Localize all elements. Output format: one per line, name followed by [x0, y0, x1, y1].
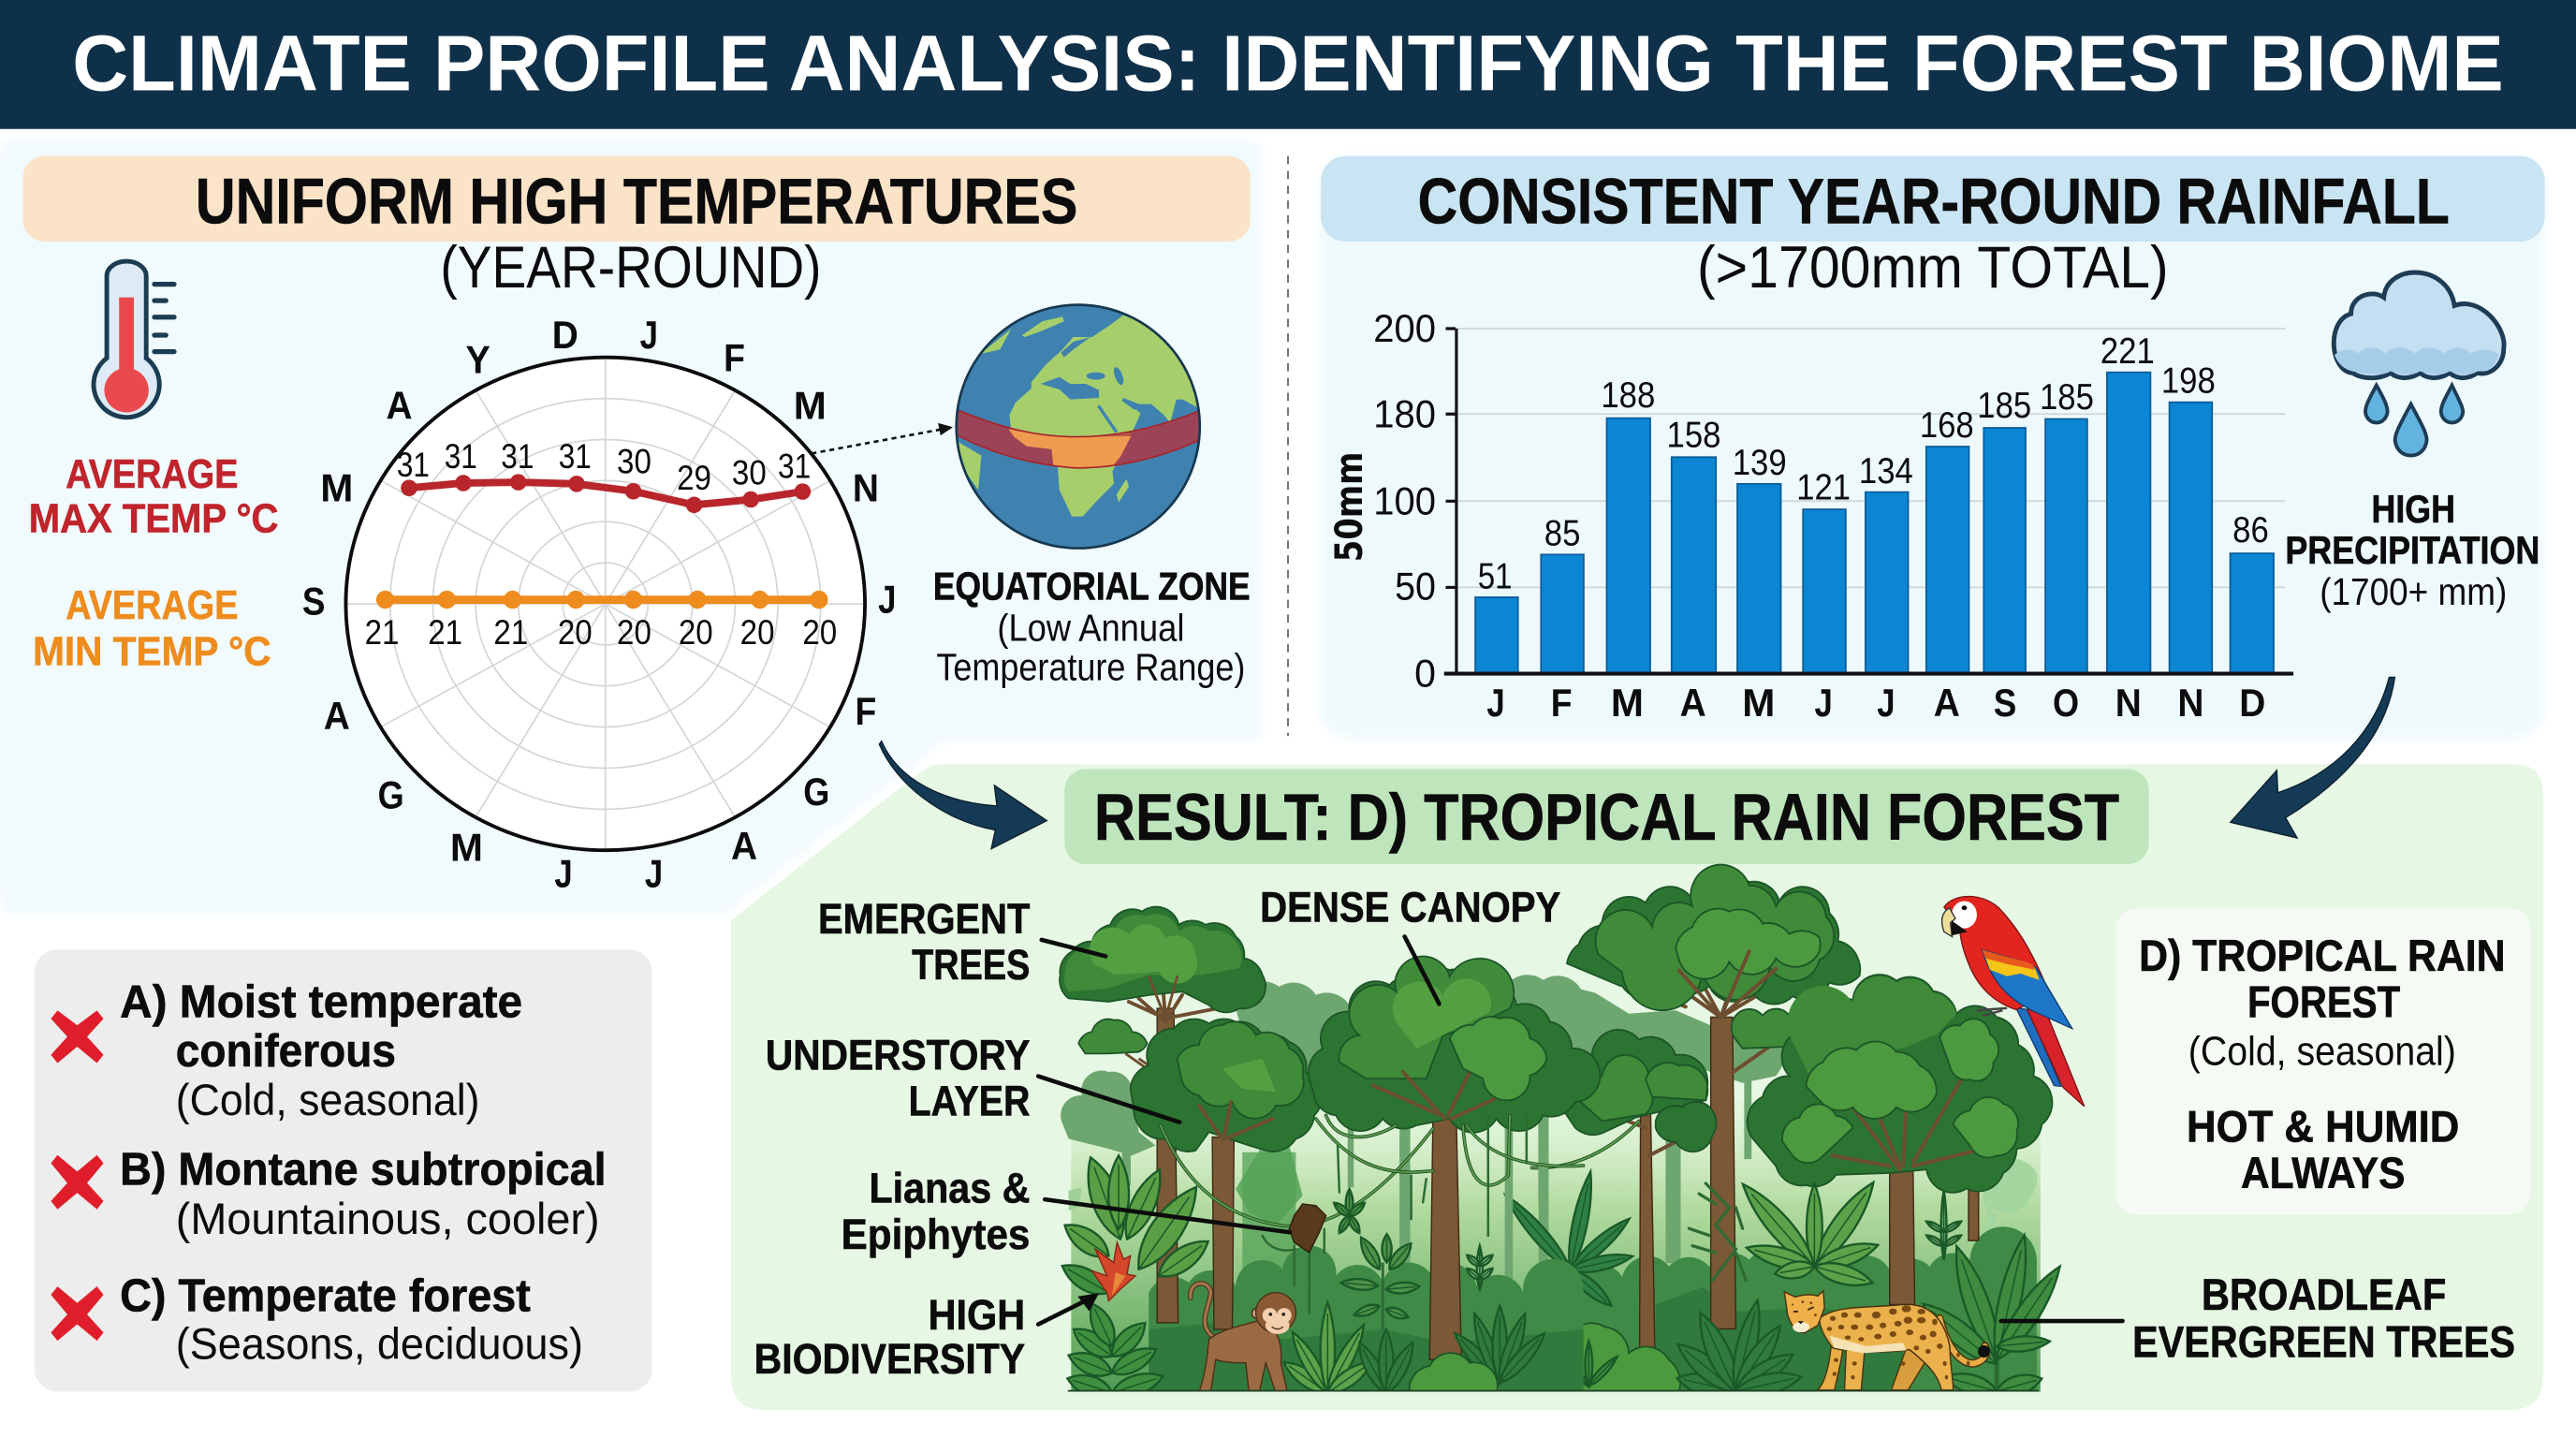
month axis labels: N	[2177, 681, 2203, 725]
arrow: temperature to result	[879, 741, 1046, 849]
min temperature line: 21	[428, 613, 462, 652]
option B	[51, 1144, 607, 1244]
labels: forest layers: HIGH	[929, 1291, 1025, 1339]
month labels: S	[302, 579, 326, 623]
panel: temperature	[0, 141, 1262, 914]
option B: B) Montane subtropical	[120, 1144, 607, 1195]
month labels: J	[554, 852, 573, 896]
month labels: A	[731, 824, 757, 868]
icon: monkey	[1191, 1284, 1295, 1393]
icon: thermometer	[94, 261, 174, 418]
month labels: M	[450, 826, 483, 870]
temperature heading: (YEAR-ROUND)	[440, 235, 822, 301]
panel: rainfall	[1319, 156, 2545, 738]
labels: forest layers: TREES	[912, 941, 1030, 989]
title banner	[0, 0, 2576, 129]
tree: understory left	[1131, 1019, 1322, 1329]
illustration: rainforest scene	[1057, 865, 2085, 1402]
month labels: G	[378, 772, 404, 816]
rainfall heading: (>1700mm TOTAL)	[1697, 235, 2169, 301]
bar values: 121	[1796, 468, 1851, 508]
bar values	[1478, 331, 2269, 596]
text: high precipitation: HIGH	[2371, 487, 2455, 531]
plants left	[1057, 1152, 1550, 1402]
forest background	[1071, 1101, 2041, 1392]
bar values: 188	[1601, 375, 1655, 416]
month axis labels: O	[2053, 681, 2079, 725]
text: high precipitation: (1700+ mm)	[2320, 570, 2507, 613]
max temperature line: 31	[445, 437, 477, 476]
bar values: 158	[1667, 415, 1720, 455]
tree: emergent left	[1060, 907, 1266, 1323]
option C: C) Temperate forest	[120, 1271, 531, 1322]
panel: result	[731, 764, 2543, 1410]
text: equatorial zone	[933, 565, 1251, 689]
month axis labels	[1486, 681, 2265, 725]
y axis labels: 200	[1373, 306, 1436, 350]
min temperature line: 20	[802, 613, 837, 652]
legend: average min temp: AVERAGE	[66, 582, 238, 628]
y axis labels: 180	[1373, 391, 1436, 435]
divider	[1287, 156, 1289, 736]
rainfall heading	[1321, 156, 2545, 301]
undergrowth right	[1584, 1226, 2037, 1390]
month axis labels: M	[1611, 681, 1644, 725]
arrow: rainfall to result	[2231, 677, 2394, 838]
y axis labels: 0	[1414, 652, 1436, 696]
option A	[51, 976, 522, 1125]
text: broadleaf evergreen trees	[2132, 1270, 2515, 1368]
icon: macaw	[1942, 897, 2085, 1107]
labels: forest layers: Lianas &	[869, 1165, 1030, 1212]
tree: central canopy	[1309, 957, 1600, 1359]
text: high precipitation	[2285, 487, 2539, 613]
month axis labels: J	[1486, 681, 1505, 725]
temperature heading	[23, 156, 1251, 301]
legend: average min temp	[33, 582, 271, 674]
bar values: 198	[2161, 360, 2216, 401]
bar values: 185	[2040, 377, 2094, 418]
result heading: RESULT: D) TROPICAL RAIN FOREST	[1094, 780, 2119, 854]
max temperature line: 30	[732, 454, 767, 492]
month labels: A	[324, 694, 350, 738]
title banner: CLIMATE PROFILE ANALYSIS: IDENTIFYING THE FOREST BIOME	[72, 20, 2504, 108]
y axis labels: 100	[1373, 478, 1436, 522]
bar values: 139	[1733, 443, 1787, 483]
labels: forest layers: UNDERSTORY	[766, 1032, 1030, 1079]
y axis labels	[1373, 306, 1436, 696]
month labels: A	[386, 384, 413, 428]
y axis title: 50mm	[1327, 452, 1371, 562]
month labels	[302, 313, 896, 896]
month axis labels: M	[1742, 681, 1775, 725]
background trees right	[1539, 989, 1782, 1264]
month axis labels: S	[1994, 681, 2016, 725]
month labels: Y	[466, 337, 490, 381]
labels: forest layers: Epiphytes	[842, 1211, 1030, 1258]
month labels: N	[853, 465, 879, 509]
bars	[1475, 373, 2274, 674]
distant foliage and trunks left	[1236, 1147, 1303, 1269]
option B: (Mountainous, cooler)	[176, 1195, 600, 1244]
option C: (Seasons, deciduous)	[176, 1319, 583, 1369]
max temperature line: 31	[778, 448, 811, 486]
card: tropical rain forest: ALWAYS	[2241, 1149, 2405, 1198]
option A: A) Moist temperate	[120, 976, 522, 1027]
legend: average max temp: MAX TEMP °C	[29, 496, 278, 542]
month axis labels: J	[1815, 681, 1833, 725]
legend: average max temp	[29, 451, 278, 542]
bar values: 86	[2232, 510, 2269, 550]
min temperature line	[365, 591, 837, 652]
max temperature line: 31	[559, 437, 592, 476]
legend: average max temp: AVERAGE	[66, 451, 238, 497]
lianas	[1161, 1115, 1584, 1313]
bar values: 185	[1977, 386, 2031, 426]
polar temperature chart	[302, 313, 896, 896]
legend: average min temp: MIN TEMP °C	[33, 628, 271, 674]
bar values: 85	[1544, 514, 1580, 554]
panel: rejected options	[35, 949, 652, 1392]
card: tropical rain forest: (Cold, seasonal)	[2188, 1028, 2456, 1074]
card: tropical rain forest	[2116, 909, 2530, 1214]
right half of forest	[1500, 865, 2069, 1401]
month labels: J	[640, 313, 658, 357]
plants right	[1500, 1170, 2069, 1401]
y axis labels: 50	[1395, 565, 1436, 609]
month labels: M	[320, 465, 353, 509]
month labels: D	[552, 313, 578, 357]
min temperature line: 21	[493, 613, 528, 652]
month labels: J	[645, 852, 663, 896]
option C	[51, 1271, 583, 1369]
tree: right emergent	[1567, 865, 1979, 1328]
month labels: F	[856, 689, 876, 733]
tree: right broadleaf	[1748, 975, 2052, 1305]
month labels: F	[724, 336, 745, 380]
month labels: G	[803, 770, 829, 814]
card: tropical rain forest: D) TROPICAL RAIN	[2139, 932, 2506, 981]
bar values: 168	[1920, 405, 1974, 446]
labels: forest layers: DENSE CANOPY	[1260, 884, 1560, 932]
min temperature line: 20	[617, 613, 651, 652]
month axis labels: F	[1551, 681, 1573, 725]
max temperature line: 31	[501, 437, 534, 476]
max temperature line: 31	[397, 446, 430, 484]
min temperature line: 20	[679, 613, 713, 652]
text: high precipitation: PRECIPITATION	[2285, 528, 2539, 572]
text: broadleaf evergreen trees: BROADLEAF	[2202, 1270, 2446, 1320]
result heading	[1064, 769, 2149, 864]
labels: forest layers: EMERGENT	[818, 895, 1031, 943]
leader lines	[1038, 936, 2123, 1325]
month axis labels: A	[1934, 681, 1960, 725]
undergrowth left	[1149, 1245, 1584, 1365]
text: equatorial zone: Temperature Range)	[936, 646, 1245, 689]
month axis labels: N	[2115, 681, 2142, 725]
card: tropical rain forest: FOREST	[2247, 977, 2400, 1027]
icon: globe with equatorial band	[953, 305, 1203, 549]
min temperature line: 20	[558, 613, 593, 652]
ground line	[1068, 1391, 2039, 1393]
month labels: M	[794, 384, 827, 428]
month axis labels: J	[1877, 681, 1895, 725]
labels: forest layers: BIODIVERSITY	[754, 1335, 1025, 1383]
bar values: 134	[1859, 451, 1913, 492]
text: equatorial zone: (Low Annual	[997, 606, 1184, 649]
icon: jaguar	[1784, 1291, 1990, 1390]
bar values: 51	[1478, 556, 1513, 596]
bar values: 221	[2100, 331, 2155, 372]
background trees left	[1061, 975, 1584, 1296]
dotted arrow to globe	[812, 423, 953, 453]
month axis labels: A	[1680, 681, 1706, 725]
text: broadleaf evergreen trees: EVERGREEN TREES	[2132, 1318, 2515, 1368]
option A: (Cold, seasonal)	[176, 1076, 479, 1125]
tree: mid layer	[1563, 1030, 1716, 1353]
card: tropical rain forest: HOT & HUMID	[2187, 1103, 2459, 1152]
text: equatorial zone: EQUATORIAL ZONE	[933, 565, 1251, 609]
icon: rain cloud	[2334, 272, 2504, 456]
left half of forest	[1057, 907, 1600, 1402]
max temperature line: 29	[677, 459, 711, 497]
month labels: J	[878, 578, 896, 622]
temperature heading: UNIFORM HIGH TEMPERATURES	[196, 166, 1077, 238]
labels: forest layers: LAYER	[909, 1078, 1030, 1125]
option A: coniferous	[176, 1026, 396, 1077]
vine right	[1532, 1121, 1746, 1281]
pale tree right	[1983, 1159, 2037, 1231]
bar chart	[1327, 306, 2293, 725]
month axis labels: D	[2239, 681, 2265, 725]
labels: forest layers	[754, 884, 1560, 1383]
max temperature line: 30	[617, 442, 651, 480]
min temperature line: 21	[365, 613, 399, 652]
min temperature line: 20	[740, 613, 775, 652]
max temperature line	[397, 437, 811, 513]
